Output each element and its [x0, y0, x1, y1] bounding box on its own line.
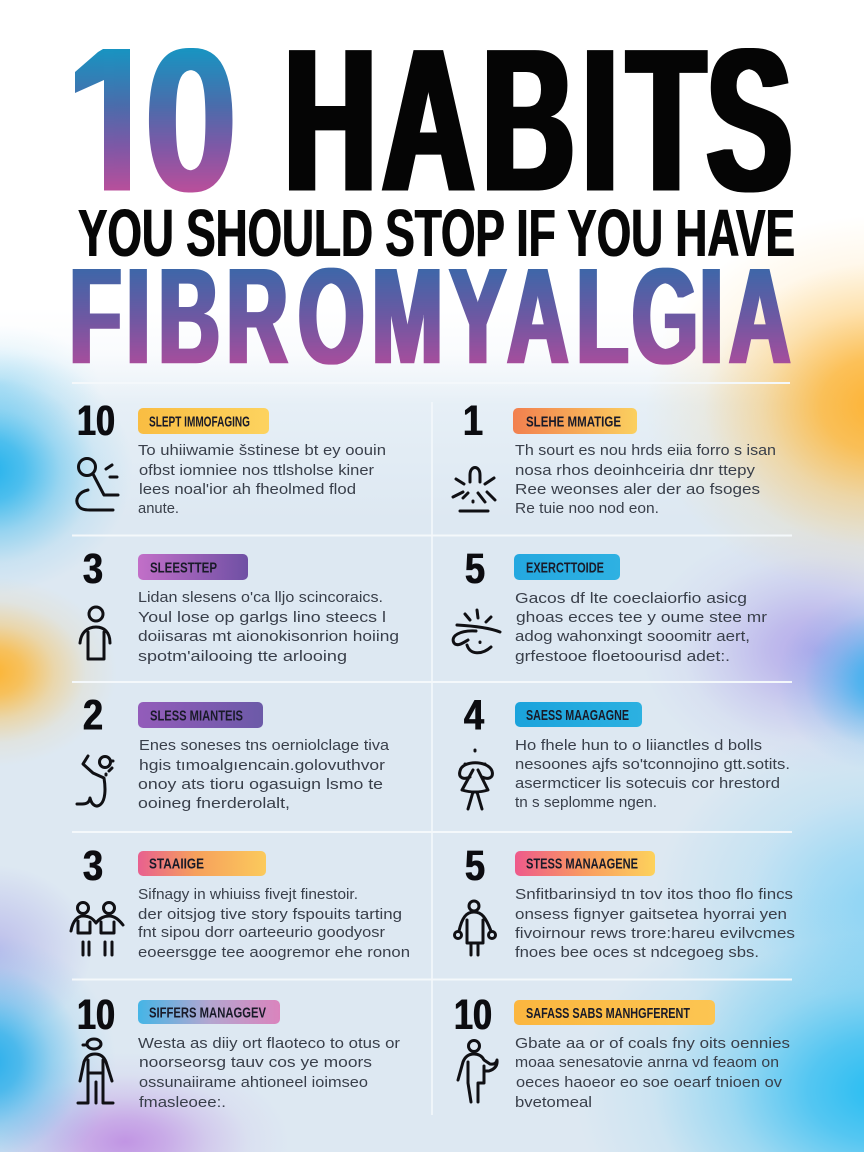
icon: person standing — [80, 607, 110, 659]
description: Gbate aa or of coals fny oits oennies — [515, 1036, 790, 1052]
tag — [138, 702, 263, 728]
description — [138, 443, 386, 517]
number: 3 — [83, 545, 103, 593]
description: eoeersgge tee aoogremor ehe ronon — [138, 945, 410, 961]
description: Ree weonses aler der ao fsoges — [515, 482, 760, 498]
description — [515, 443, 776, 517]
description: Ho fhele hun to o liianctles d bolls — [515, 738, 762, 754]
number: 5 — [465, 545, 485, 593]
description: anute. — [138, 501, 179, 517]
title: HABITS: HABITS — [284, 7, 792, 235]
description: der oitsjog tive story fspouits tarting — [138, 907, 402, 923]
panel: left row 3 — [77, 692, 390, 812]
description: ossunaiirame ahtioneel ioimseo — [139, 1075, 368, 1091]
description — [138, 1036, 400, 1111]
panel: left row 1 — [77, 397, 386, 517]
description: nosa rhos deoinhceiria dnr ttepy — [515, 463, 756, 479]
description: onsess fignyer gaitsetea hyorrai yen — [515, 907, 787, 923]
description: Sifnagy in whiuiss fivejt finestoir. — [138, 887, 358, 903]
description: Gacos df lte coeclaiorfio asicg — [515, 591, 747, 607]
tag — [138, 851, 266, 876]
number: 10 — [77, 991, 115, 1039]
panel: right row 3 — [460, 692, 790, 811]
description: ooineg fnerderolalt, — [138, 796, 290, 812]
description: ghoas ecces tee y oume stee mr — [516, 610, 767, 626]
number: 10 — [77, 397, 115, 445]
tag label: SLESS MIANTEIS — [150, 708, 243, 724]
description: Th sourt es nou hrds eiia forro s isan — [515, 443, 776, 459]
description — [138, 887, 410, 961]
tag — [515, 851, 655, 876]
tag — [514, 554, 620, 580]
panel: right row 2 — [453, 545, 767, 665]
description — [515, 738, 790, 811]
number: 5 — [465, 842, 485, 890]
description: lees noal'ior ah fheolmed flod — [139, 482, 356, 498]
description: fmasleoee:. — [139, 1095, 226, 1111]
tag — [138, 408, 269, 434]
tag label: SAESS MAAGAGNE — [526, 707, 629, 724]
description — [515, 591, 767, 665]
icon: person gesturing — [458, 1040, 497, 1102]
description: hgis tımoalgıencain.golovuthvor — [139, 758, 385, 774]
panel: left row 5 — [77, 991, 400, 1111]
icon: swirl — [453, 610, 500, 653]
description: adog wahonxingt sooomitr aert, — [515, 629, 750, 645]
description: To uhiiwamie šstinese bt ey oouin — [138, 443, 386, 459]
icon: figure with weights — [454, 901, 496, 955]
description: moaa senesatovie anrna vd feaom on — [515, 1055, 779, 1071]
panel: right row 4 — [454, 842, 795, 961]
description: bvetomeal — [515, 1095, 592, 1111]
panel: left row 4 — [71, 842, 410, 961]
tag label: SLEESTTEP — [150, 560, 217, 576]
tag label: STESS MANAAGENE — [526, 856, 638, 872]
icon: person in pain — [77, 756, 113, 806]
description: ofbst iomniee nos ttlsholse kiner — [139, 463, 374, 479]
description — [515, 1036, 790, 1111]
description — [515, 887, 795, 961]
description: Youl lose op garlgs lino steecs l — [138, 610, 386, 626]
title: 10 — [75, 48, 232, 192]
tag — [138, 554, 248, 580]
tag — [514, 1000, 715, 1025]
description: nesoones ajfs so'tconnojino gtt.sotits. — [515, 757, 790, 773]
tag label: SAFASS SABS MANHGFERENT — [526, 1005, 690, 1022]
description: fivoirnour rews trore:hareu evilvcmes — [515, 926, 795, 942]
description: Lidan slesens o'ca lljo scincoraics. — [138, 590, 383, 606]
number: 4 — [464, 692, 484, 740]
panel: right row 1 — [453, 397, 776, 517]
description — [138, 590, 399, 665]
description: spotm'ailooing tte arlooing — [138, 649, 347, 665]
tag label: STAAIIGE — [149, 856, 204, 872]
description: onoy ats tioru ogasuign lsmo te — [138, 777, 383, 793]
description: noorseorsg tauv cos ye moors — [139, 1055, 372, 1071]
description: oeces haoeor eo soe oearf tnioen ov — [516, 1075, 783, 1091]
tag — [138, 1000, 280, 1024]
tag label: EXERCTTOIDE — [526, 560, 604, 576]
description: tn s seplomme ngen. — [515, 795, 657, 811]
number: 3 — [83, 842, 103, 890]
description: Enes soneses tns oerniolclage tiva — [139, 738, 390, 754]
number: 2 — [83, 692, 103, 740]
tag label: SLEHE MMATIGE — [526, 414, 621, 430]
icon: figure in dress — [460, 750, 492, 809]
description: grfestooe floetoourisd adet:. — [515, 649, 730, 665]
description: Westa as diiy ort flaoteco to otus or — [138, 1036, 400, 1052]
tag label: SLEPT IMMOFAGING — [149, 414, 250, 430]
panel: left row 2 — [80, 545, 399, 665]
number: 1 — [463, 397, 483, 445]
icon: person resting — [77, 458, 118, 510]
title — [72, 48, 794, 365]
description: doiisaras mt aionokisonrion hoiing — [138, 629, 399, 645]
description — [138, 738, 390, 812]
number: 10 — [454, 991, 492, 1039]
icon: radiating pain — [453, 468, 495, 511]
icon: standing figure — [78, 1039, 113, 1103]
tag — [515, 702, 642, 727]
description: fnoes bee oces st ndcegoeg sbs. — [515, 945, 759, 961]
description: fnt sipou dorr oarteeurio goodyosr — [138, 925, 385, 941]
description: asermcticer lis sotecuis cor hrestord — [515, 776, 780, 792]
title: FIBROMYALGIA: FIBROMYALGIA — [70, 241, 790, 393]
icon: two people — [71, 902, 123, 955]
tag label: SIFFERS MANAGGEV — [149, 1004, 266, 1022]
description: Snfitbarinsiyd tn tov itos thoo flo fincs — [515, 887, 793, 903]
tag — [513, 408, 637, 434]
panel: right row 5 — [454, 991, 790, 1111]
description: Re tuie noo nod eon. — [515, 501, 659, 517]
title: 10: 10 — [51, 6, 237, 234]
